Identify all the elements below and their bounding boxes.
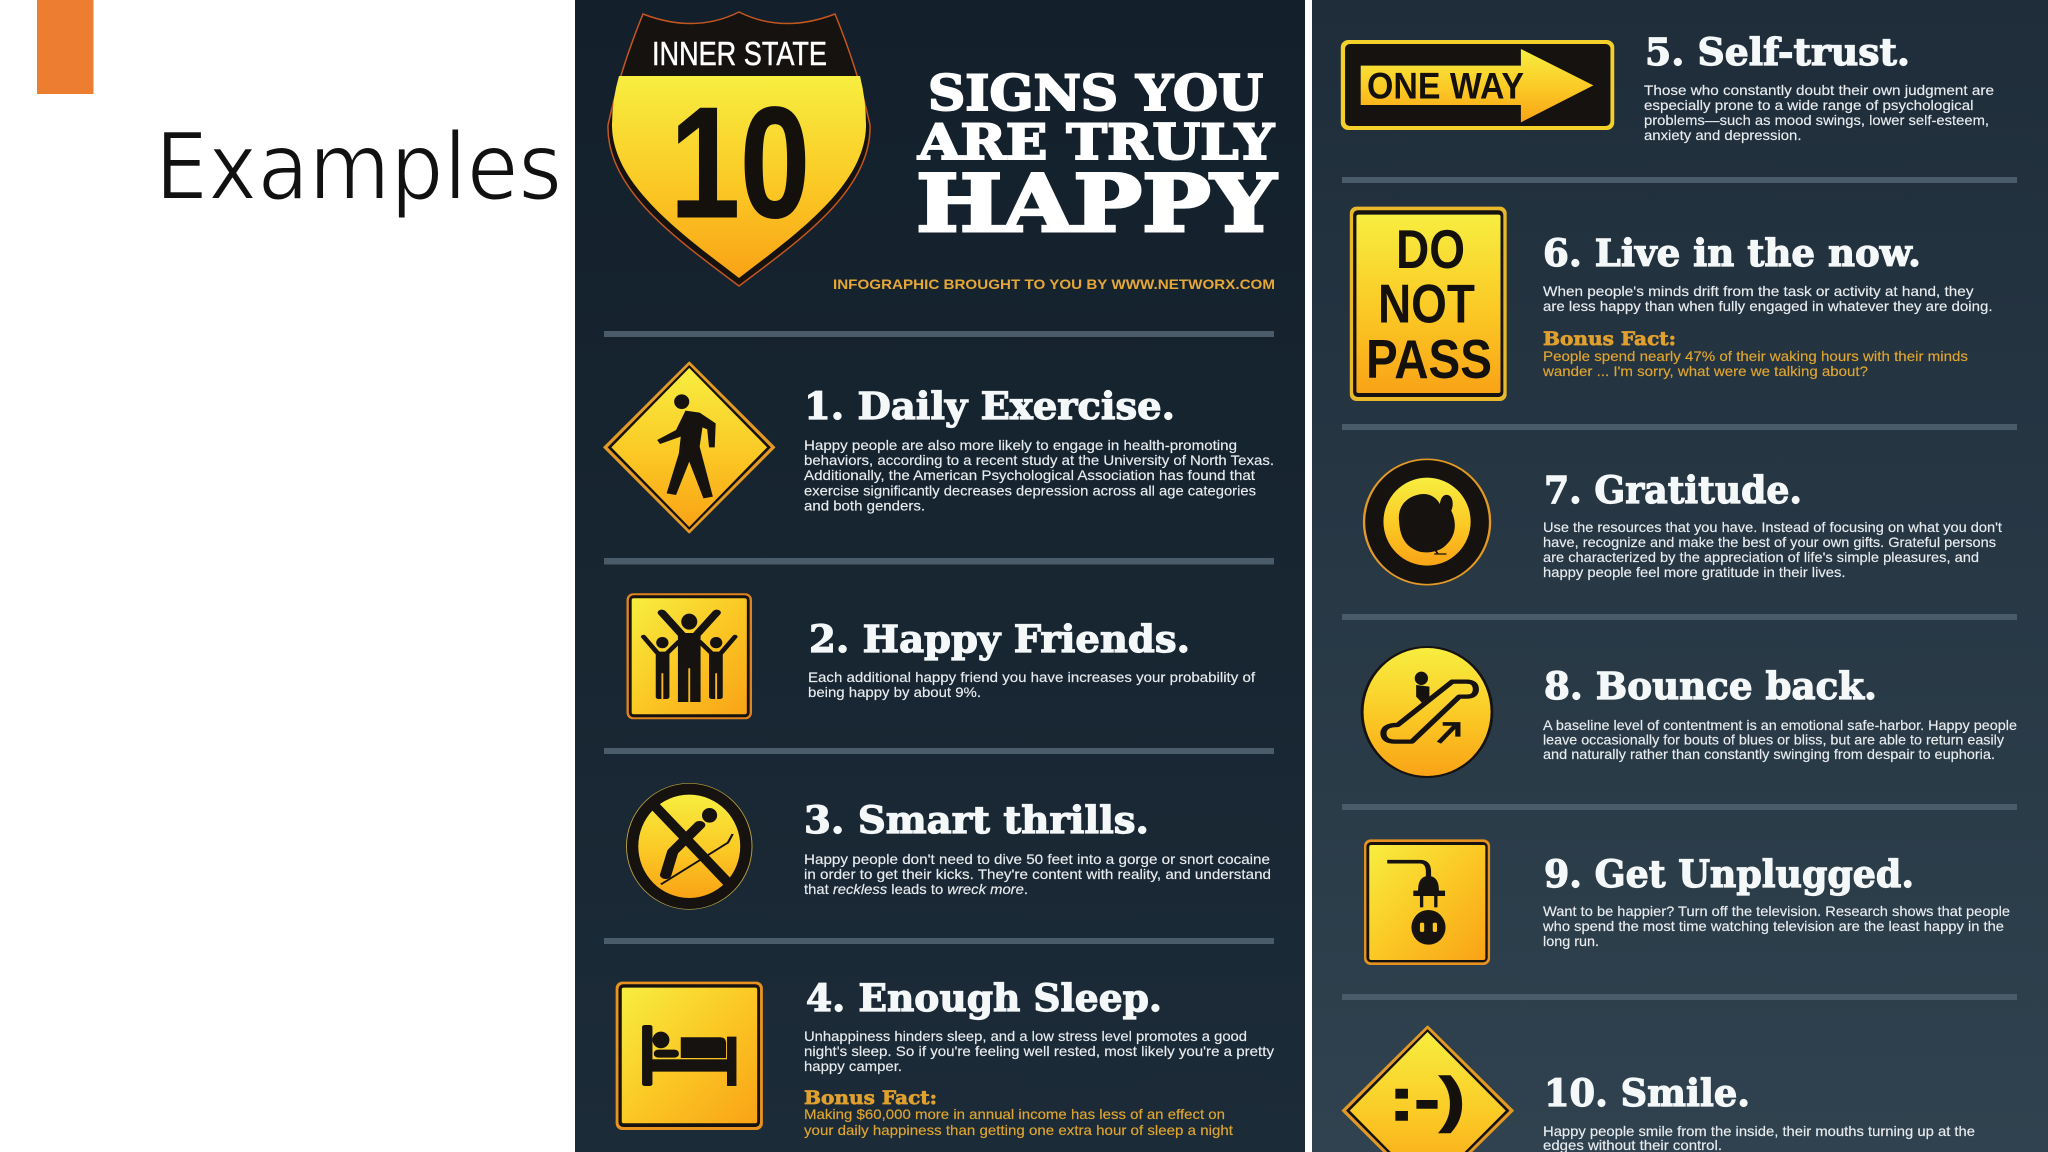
body text: night's sleep. So if you're feeling well rested, most likely you're a pretty xyxy=(804,1044,1274,1059)
heading: signs you are truly happy: HAPPY xyxy=(916,157,1278,250)
panel: 6 live in the now xyxy=(1350,207,1992,401)
body text xyxy=(1543,1124,1975,1152)
heading: signs you are truly happy: ARE TRULY xyxy=(917,113,1275,171)
bonus fact: Bonus Fact: xyxy=(1543,328,1676,350)
body text: especially prone to a wide range of psychological xyxy=(1644,98,1974,113)
icon: smiley diamond xyxy=(1342,1026,1513,1152)
body text xyxy=(804,438,1274,514)
icon: no skiing circle xyxy=(626,783,752,909)
body text xyxy=(1543,284,1992,314)
header: infographic title block xyxy=(608,12,1278,292)
body text: Use the resources that you have. Instead of focusing on what you don't xyxy=(1543,520,2002,535)
icon: inner state 10 shield xyxy=(608,12,870,286)
body text: Those who constantly doubt their own judgment are xyxy=(1644,83,1994,98)
icon: escalator circle xyxy=(1361,646,1493,778)
icon: inner state 10 shield: INNER STATE xyxy=(652,35,827,72)
heading: signs you are truly happy: SIGNS YOU xyxy=(928,64,1263,122)
heading: 4. Enough Sleep. xyxy=(806,976,1162,1020)
body text: happy camper. xyxy=(804,1059,902,1074)
body text xyxy=(1543,718,2017,762)
body text: behaviors, according to a recent study at the University of North Texas. xyxy=(804,453,1274,468)
body text: exercise significantly decreases depression across all age categories xyxy=(804,484,1256,498)
panel: 10 smile xyxy=(1342,1026,1975,1152)
bonus fact: Making $60,000 more in annual income has less of an effect on xyxy=(804,1107,1225,1122)
body text: Additionally, the American Psychological Association has found that xyxy=(804,468,1255,483)
panel: 3 smart thrills xyxy=(626,783,1271,909)
body text: leave occasionally for bouts of blues or bliss, but are able to return easily xyxy=(1543,732,2004,748)
icon: pedestrian diamond xyxy=(604,362,775,533)
body text: Happy people smile from the inside, their mouths turning up at the xyxy=(1543,1124,1975,1139)
panel: 9 get unplugged xyxy=(1364,839,2010,965)
body text: are characterized by the appreciation of life's simple pleasures, and xyxy=(1543,550,1979,565)
icon: inner state 10 shield: 10 xyxy=(670,75,810,251)
heading: 10. Smile. xyxy=(1544,1071,1750,1115)
heading: signs you are truly happy xyxy=(916,64,1278,250)
icon: do not pass sign: DO xyxy=(1396,218,1465,280)
panel: 4 enough sleep xyxy=(616,976,1274,1138)
body text: long run. xyxy=(1543,934,1599,949)
heading: 1. Daily Exercise. xyxy=(804,384,1175,428)
heading: 5. Self-trust. xyxy=(1645,30,1910,74)
panel: 8 bounce back xyxy=(1361,646,2017,778)
heading: 3. Smart thrills. xyxy=(804,798,1149,842)
icon: smiley diamond: :-) xyxy=(1389,1066,1465,1133)
body text xyxy=(804,1029,1274,1074)
panel: 5 self-trust xyxy=(1341,30,1994,143)
icon: do not pass sign: NOT xyxy=(1378,272,1475,334)
body text: anxiety and depression. xyxy=(1644,128,1802,143)
bonus fact: wander ... I'm sorry, what were we talking about? xyxy=(1542,364,1868,379)
credit line: INFOGRAPHIC BROUGHT TO YOU BY WWW.NETWORX.COM xyxy=(833,276,1275,292)
icon: three cheering figures xyxy=(626,593,752,719)
panel: left infographic background xyxy=(575,0,1305,1152)
panel: 2 happy friends xyxy=(626,593,1255,719)
bonus fact: People spend nearly 47% of their waking hours with their minds xyxy=(1543,349,1968,364)
body text: Want to be happier? Turn off the television. Research shows that people xyxy=(1543,904,2010,919)
bonus fact: Bonus Fact: xyxy=(804,1087,937,1109)
panel: 7 gratitude xyxy=(1364,459,2002,585)
body text: in order to get their kicks. They're content with reality, and understand xyxy=(804,867,1271,882)
body text: that reckless leads to wreck more . xyxy=(804,882,1028,897)
panel: 1 daily exercise xyxy=(604,362,1274,533)
accent bar xyxy=(37,0,94,94)
icon: turkey circle xyxy=(1364,459,1490,585)
body text: happy people feel more gratitude in their lives. xyxy=(1543,565,1846,580)
body text: have, recognize and make the best of your own gifts. Grateful persons xyxy=(1543,535,1996,550)
body text: are less happy than when fully engaged in whatever they are doing. xyxy=(1543,299,1992,314)
body text: A baseline level of contentment is an emotional safe-harbor. Happy people xyxy=(1543,718,2017,733)
icon: one way sign xyxy=(1341,40,1614,130)
bonus fact xyxy=(1542,328,1968,379)
icon: plug and socket sign xyxy=(1364,839,1490,965)
body text: and naturally rather than constantly swinging from despair to euphoria. xyxy=(1543,747,1995,762)
body text xyxy=(1543,520,2002,580)
bonus fact xyxy=(804,1087,1233,1138)
heading: 8. Bounce back. xyxy=(1544,664,1877,708)
body text: Each additional happy friend you have increases your probability of xyxy=(808,670,1255,685)
body text: problems—such as mood swings, lower self-esteem, xyxy=(1644,113,1989,128)
heading: 9. Get Unplugged. xyxy=(1544,852,1914,896)
icon: do not pass sign: PASS xyxy=(1366,328,1492,390)
icon: bed sign xyxy=(616,982,763,1130)
title: Examples xyxy=(155,113,562,221)
panel: right infographic background xyxy=(1312,0,2048,1152)
heading: 7. Gratitude. xyxy=(1544,468,1802,512)
body text: Happy people don't need to dive 50 feet into a gorge or snort cocaine xyxy=(804,852,1270,867)
body text: being happy by about 9%. xyxy=(808,685,981,700)
body text: When people's minds drift from the task or activity at hand, they xyxy=(1543,284,1974,299)
body text: and both genders. xyxy=(804,498,925,514)
heading: 6. Live in the now. xyxy=(1543,231,1921,275)
bonus fact: your daily happiness than getting one extra hour of sleep a night xyxy=(804,1123,1233,1138)
body text xyxy=(804,852,1271,897)
body text: who spend the most time watching television are the least happy in the xyxy=(1542,919,2004,934)
heading: 2. Happy Friends. xyxy=(809,617,1190,661)
icon: one way sign: ONE WAY xyxy=(1367,66,1524,106)
body text xyxy=(1644,83,1994,143)
body text xyxy=(808,670,1255,700)
body text: Happy people are also more likely to engage in health-promoting xyxy=(804,438,1237,453)
body text: Unhappiness hinders sleep, and a low stress level promotes a good xyxy=(804,1029,1247,1044)
body text xyxy=(1542,904,2010,949)
icon: do not pass sign xyxy=(1350,207,1507,401)
